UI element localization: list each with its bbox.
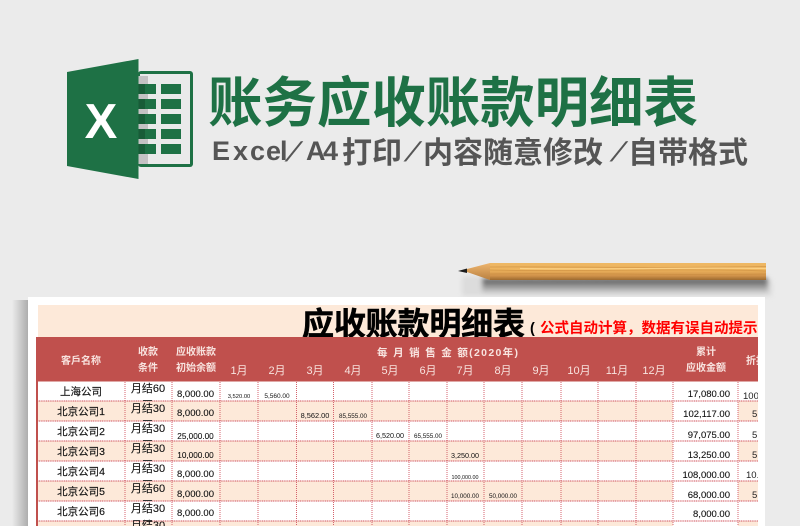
monthly sales values: 8,562.00 bbox=[301, 411, 329, 420]
header labels bbox=[61, 345, 766, 377]
header labels: 应收账款 bbox=[176, 345, 216, 358]
table header band bbox=[36, 337, 758, 382]
opening balances: 8,000.00 bbox=[177, 408, 214, 419]
header labels: 6月 bbox=[419, 365, 437, 377]
header labels: 5月 bbox=[381, 365, 399, 377]
opening balances: 8,000.00 bbox=[177, 469, 214, 480]
payment terms: 月结30 bbox=[131, 442, 165, 455]
header labels: 收款 bbox=[138, 345, 158, 358]
payment terms: 月结30 bbox=[131, 462, 165, 475]
header labels: 3月 bbox=[306, 365, 324, 377]
paper bbox=[28, 297, 765, 526]
payment terms: 月结30 bbox=[131, 422, 165, 435]
excel logo icon bbox=[67, 59, 193, 179]
cumulative receivable: 8,000.00 bbox=[693, 509, 730, 520]
cumulative receivable: 108,000.00 bbox=[682, 470, 730, 481]
header labels: 4月 bbox=[344, 365, 362, 377]
monthly sales values: 85,555.00 bbox=[339, 413, 368, 420]
discount column: 5. bbox=[752, 450, 760, 461]
title: 账务应收账款明细表 bbox=[208, 73, 698, 134]
monthly sales values: 3,250.00 bbox=[451, 451, 479, 460]
header labels: 9月 bbox=[532, 365, 550, 377]
customer names: 北京公司3 bbox=[57, 445, 105, 458]
subtitle: A4 bbox=[306, 136, 338, 166]
cumulative receivable: 102,117.00 bbox=[683, 409, 730, 420]
subtitle: 自带格式 bbox=[628, 137, 748, 170]
cumulative receivable: 13,250.00 bbox=[688, 450, 730, 461]
header labels: 7月 bbox=[456, 365, 474, 377]
header labels: 条件 bbox=[138, 361, 158, 374]
customer names: 北京公司4 bbox=[57, 465, 105, 478]
excel logo icon: X bbox=[85, 95, 118, 149]
customer names: 北京公司1 bbox=[57, 405, 105, 418]
cumulative receivable: 17,080.00 bbox=[688, 389, 730, 400]
opening balances: 8,000.00 bbox=[177, 389, 214, 400]
table grid bbox=[37, 381, 758, 526]
customer names: 北京公司6 bbox=[57, 505, 105, 518]
header labels: 11月 bbox=[606, 365, 628, 377]
payment terms: 月结30 bbox=[131, 402, 165, 415]
opening balances bbox=[177, 389, 214, 519]
payment terms: 月结30 bbox=[131, 502, 165, 515]
opening balances: 8,000.00 bbox=[177, 508, 214, 519]
monthly sales values: 65,555.00 bbox=[414, 433, 443, 440]
header labels: 应收金额 bbox=[686, 361, 726, 374]
subtitle: 打印 bbox=[342, 137, 402, 170]
monthly sales values: 6,520.00 bbox=[376, 431, 404, 440]
pencil shadow bbox=[462, 276, 772, 296]
pencil bbox=[458, 263, 766, 280]
header labels: 1月 bbox=[230, 365, 248, 377]
header labels: 初始余额 bbox=[176, 361, 216, 374]
monthly sales values: 10,000.00 bbox=[451, 493, 480, 500]
opening balances: 8,000.00 bbox=[177, 489, 214, 500]
paper stack shadow bbox=[12, 300, 29, 526]
payment terms: 月结60 bbox=[131, 482, 165, 495]
payment terms: 月结60 bbox=[131, 382, 165, 395]
subtitle: / bbox=[282, 138, 306, 168]
formula note: ( bbox=[530, 321, 535, 337]
subtitle: Excel bbox=[212, 136, 288, 166]
header labels: 8月 bbox=[494, 365, 512, 377]
opening balances: 10,000.00 bbox=[177, 451, 214, 460]
header labels: 2月 bbox=[268, 365, 286, 377]
header labels: 折扣 bbox=[746, 354, 766, 367]
customer names bbox=[57, 385, 105, 518]
discount column bbox=[744, 392, 758, 498]
subtitle bbox=[212, 136, 748, 170]
cumulative receivable bbox=[682, 389, 730, 520]
payment terms bbox=[131, 382, 165, 526]
discount column: 5. bbox=[752, 490, 760, 501]
sheet title: 应收账款明细表 bbox=[302, 306, 525, 342]
subtitle: / bbox=[607, 138, 631, 168]
monthly sales values: 50,000.00 bbox=[489, 493, 518, 500]
opening balances: 25,000.00 bbox=[177, 432, 214, 441]
subtitle: / bbox=[401, 138, 425, 168]
discount column: 5. bbox=[752, 430, 760, 441]
red note: 公式自动计算，数据有误自动提示 bbox=[540, 319, 758, 337]
cumulative receivable: 97,075.00 bbox=[688, 430, 730, 441]
discount column: 5. bbox=[752, 409, 760, 420]
customer names: 北京公司5 bbox=[57, 485, 105, 498]
monthly sales values: 3,520.00 bbox=[228, 394, 250, 400]
spreadsheet bbox=[36, 305, 766, 526]
header labels: 客戶名称 bbox=[61, 354, 101, 367]
monthly sales values: 5,560.00 bbox=[264, 393, 290, 400]
customer names: 上海公司 bbox=[60, 385, 102, 398]
monthly sales values: 100,000.00 bbox=[452, 475, 478, 481]
discount column: 100. bbox=[743, 391, 762, 402]
discount column: 10. bbox=[746, 470, 759, 481]
subtitle: 内容随意修改 bbox=[423, 137, 603, 170]
header labels: 12月 bbox=[642, 365, 666, 377]
header labels: 10月 bbox=[567, 365, 591, 377]
alternating row bands bbox=[37, 401, 758, 526]
header labels: 每 月 销 售 金 额(2020年) bbox=[377, 346, 518, 359]
header labels: 累计 bbox=[696, 345, 716, 358]
sheet title band bbox=[38, 305, 758, 337]
cumulative receivable: 68,000.00 bbox=[688, 490, 730, 501]
customer names: 北京公司2 bbox=[57, 425, 105, 438]
monthly sales values bbox=[228, 393, 518, 500]
